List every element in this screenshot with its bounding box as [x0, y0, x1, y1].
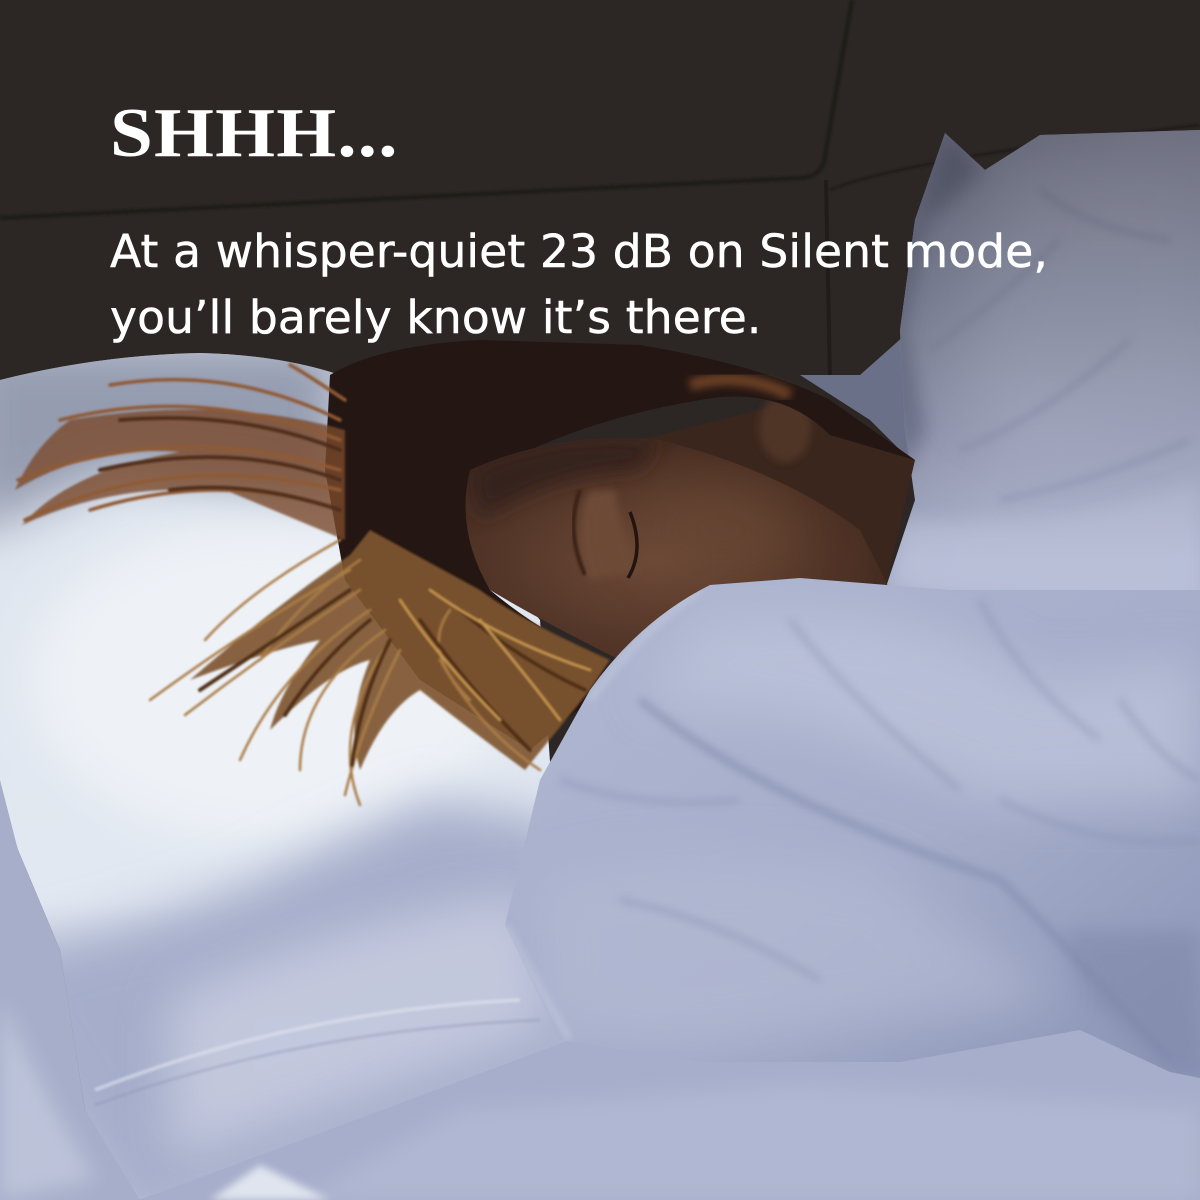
lower sheet: [0, 780, 1200, 1200]
body text: you’ll barely know it’s there.: [110, 291, 761, 344]
face: [466, 438, 890, 660]
main pillow: [0, 340, 590, 1200]
body text: [110, 225, 1048, 344]
front duvet: [505, 578, 1200, 1078]
title: SHHH...: [110, 95, 399, 172]
body text: At a whisper-quiet 23 dB on Silent mode,: [110, 225, 1048, 278]
neck and shoulder: [640, 394, 915, 620]
hair strands: [15, 365, 610, 805]
back pillow and upper duvet: [800, 130, 1200, 590]
hair mass: [325, 340, 915, 750]
